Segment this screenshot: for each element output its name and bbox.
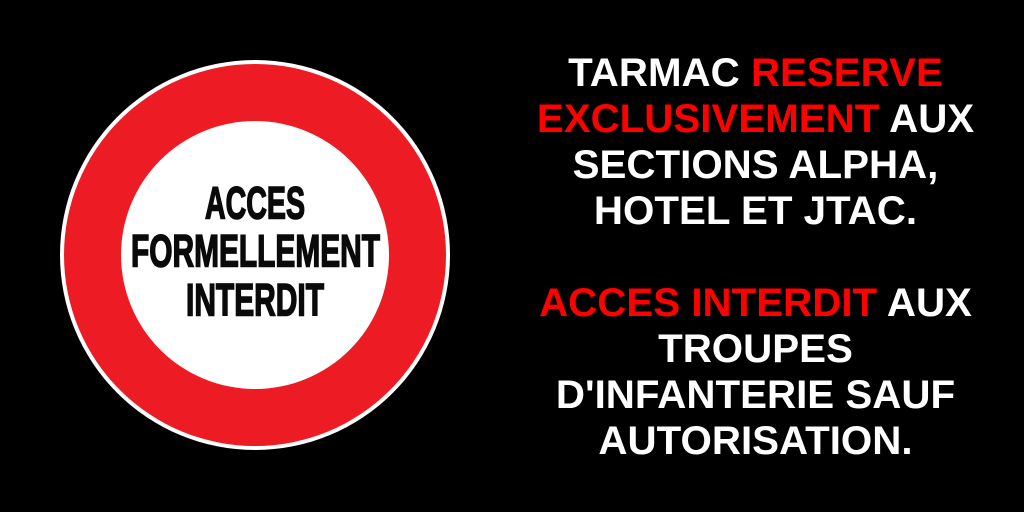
text block: tarmac message: TROUPES — [658, 326, 853, 370]
sign text: acces formellement interdit: INTERDIT — [186, 274, 324, 326]
text block: tarmac message: ACCES INTERDIT AUX — [539, 280, 972, 324]
sign text: acces formellement interdit — [131, 178, 380, 326]
sign text: acces formellement interdit: ACCES — [205, 178, 305, 228]
text block: tarmac message — [537, 50, 974, 462]
text block: tarmac message: HOTEL ET JTAC. — [594, 188, 917, 232]
text block: tarmac message: TARMAC RESERVE — [568, 50, 943, 94]
text block: tarmac message: D'INFANTERIE SAUF — [556, 372, 955, 416]
icon: prohibition road sign — [60, 60, 450, 450]
text block: tarmac message: SECTIONS ALPHA, — [573, 142, 938, 186]
text block: tarmac message: EXCLUSIVEMENT AUX — [537, 96, 974, 140]
sign text: acces formellement interdit: FORMELLEMENT — [131, 226, 380, 276]
text block: tarmac message: AUTORISATION. — [598, 418, 913, 462]
